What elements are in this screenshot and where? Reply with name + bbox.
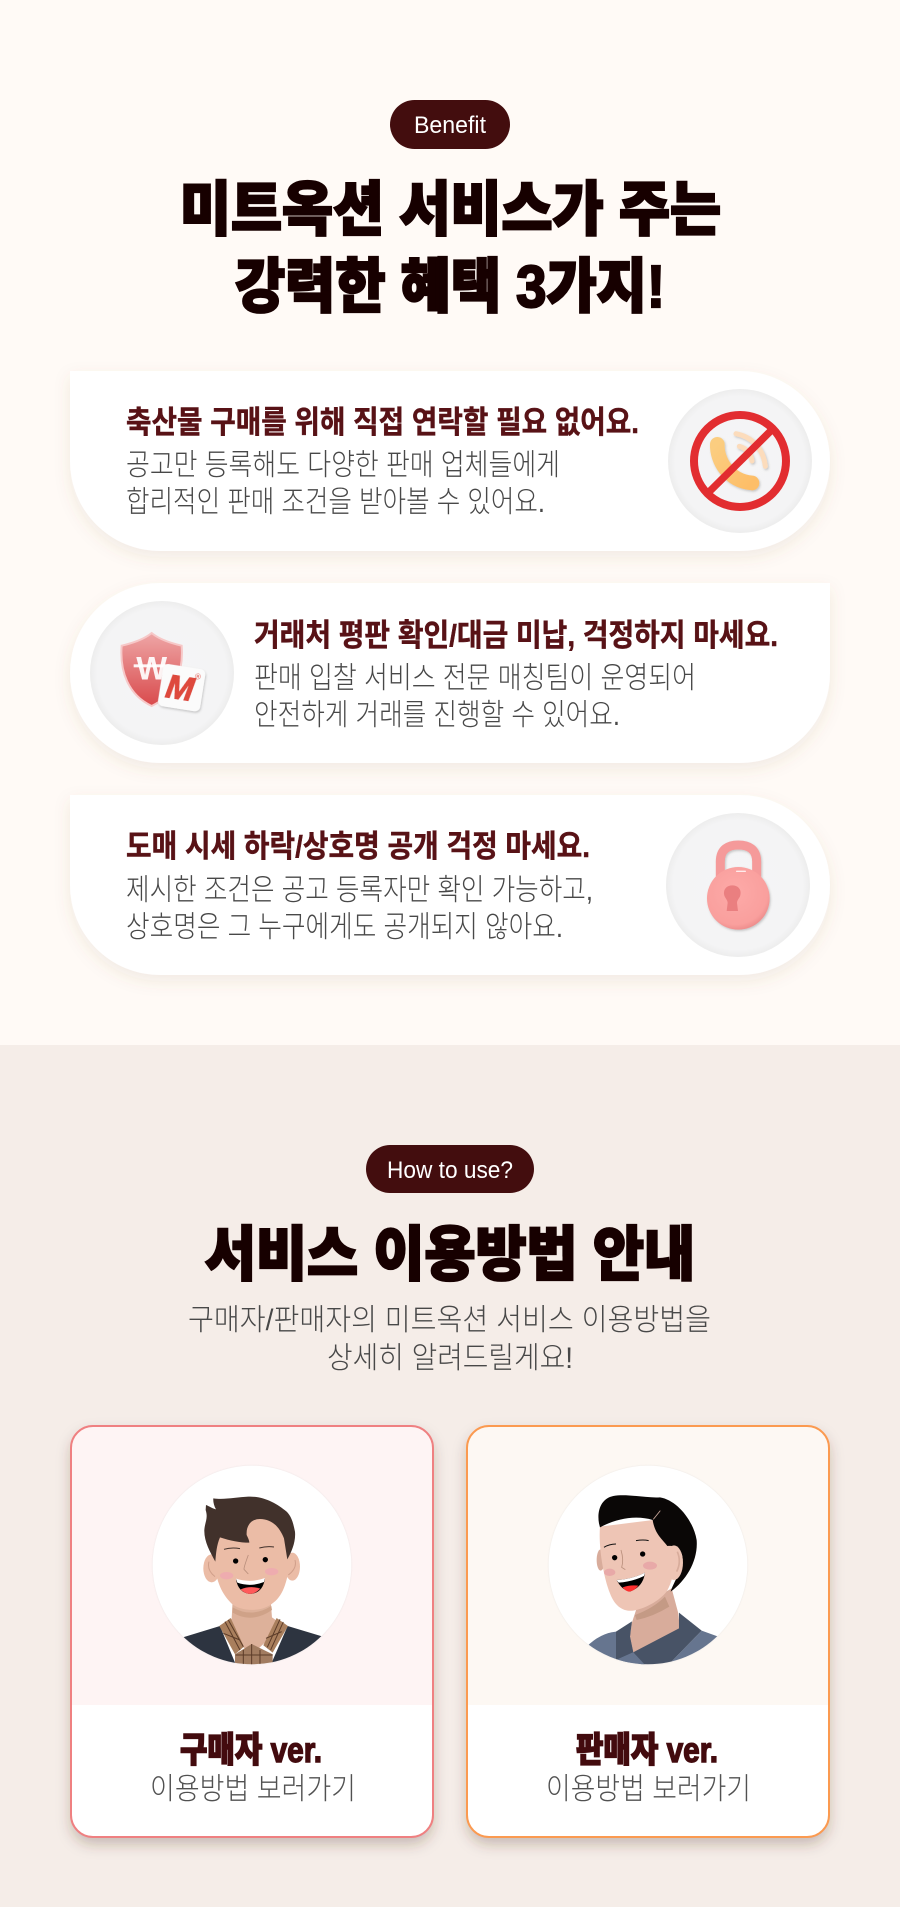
title: how to use heading: 서비스 이용방법 안내 [205,1222,695,1288]
card: buyer version [71,1426,433,1837]
section background: how to use [0,1045,900,1907]
benefit 2 description: 안전하게 거래를 진행할 수 있어요. [254,699,620,732]
title: benefit heading: 강력한 혜택 3가지! [235,254,665,320]
icon: padlock [666,813,810,957]
subtitle: how to use description: 상세히 알려드릴게요! [327,1342,573,1375]
badge: Benefit: Benefit [414,112,486,139]
icon: no phone calls [668,389,812,533]
panel: benefit 3 price and trade name [70,795,830,975]
icon: shield and M card: W [136,650,167,687]
panel: benefit 2 reputation and payment [70,583,830,763]
benefit 3 description: 상호명은 그 누구에게도 공개되지 않아요. [126,911,563,944]
seller label: 판매자 ver. [576,1731,718,1770]
icon: shield and M card: M [163,668,198,710]
title: benefit heading [180,177,721,320]
benefit 2 heading: 거래처 평판 확인/대금 미납, 걱정하지 마세요. [254,618,778,653]
badge: How to use? [366,1145,534,1193]
avatar: seller man [549,1466,747,1667]
benefit 3 heading: 도매 시세 하락/상호명 공개 걱정 마세요. [126,829,590,864]
avatar: buyer man [153,1466,351,1667]
section background: benefit [0,0,900,1045]
title: benefit heading: 미트옥션 서비스가 주는 [180,177,721,243]
benefit 1 description [126,449,560,519]
subtitle: how to use description: 구매자/판매자의 미트옥션 서비스 이용방법을 [188,1304,711,1337]
benefit 1 heading: 축산물 구매를 위해 직접 연락할 필요 없어요. [126,405,639,440]
icon: shield and M card: ® [194,672,202,682]
card: seller version [467,1426,829,1837]
seller link text: 이용방법 보러가기 [546,1773,751,1806]
benefit 1 description: 합리적인 판매 조건을 받아볼 수 있어요. [126,486,545,519]
panel: benefit 1 no direct contact [70,371,830,551]
benefit 3 description: 제시한 조건은 공고 등록자만 확인 가능하고, [126,874,593,907]
icon: shield and M card [90,601,234,745]
buyer link text: 이용방법 보러가기 [150,1773,356,1806]
benefit 2 description [254,662,696,732]
badge: Benefit [390,100,510,149]
badge: How to use?: How to use? [387,1157,513,1184]
benefit 2 description: 판매 입찰 서비스 전문 매칭팀이 운영되어 [254,662,696,695]
benefit 3 description [126,874,593,944]
subtitle: how to use description [188,1304,711,1375]
benefit 1 description: 공고만 등록해도 다양한 판매 업체들에게 [126,449,560,482]
buyer label: 구매자 ver. [180,1731,322,1770]
